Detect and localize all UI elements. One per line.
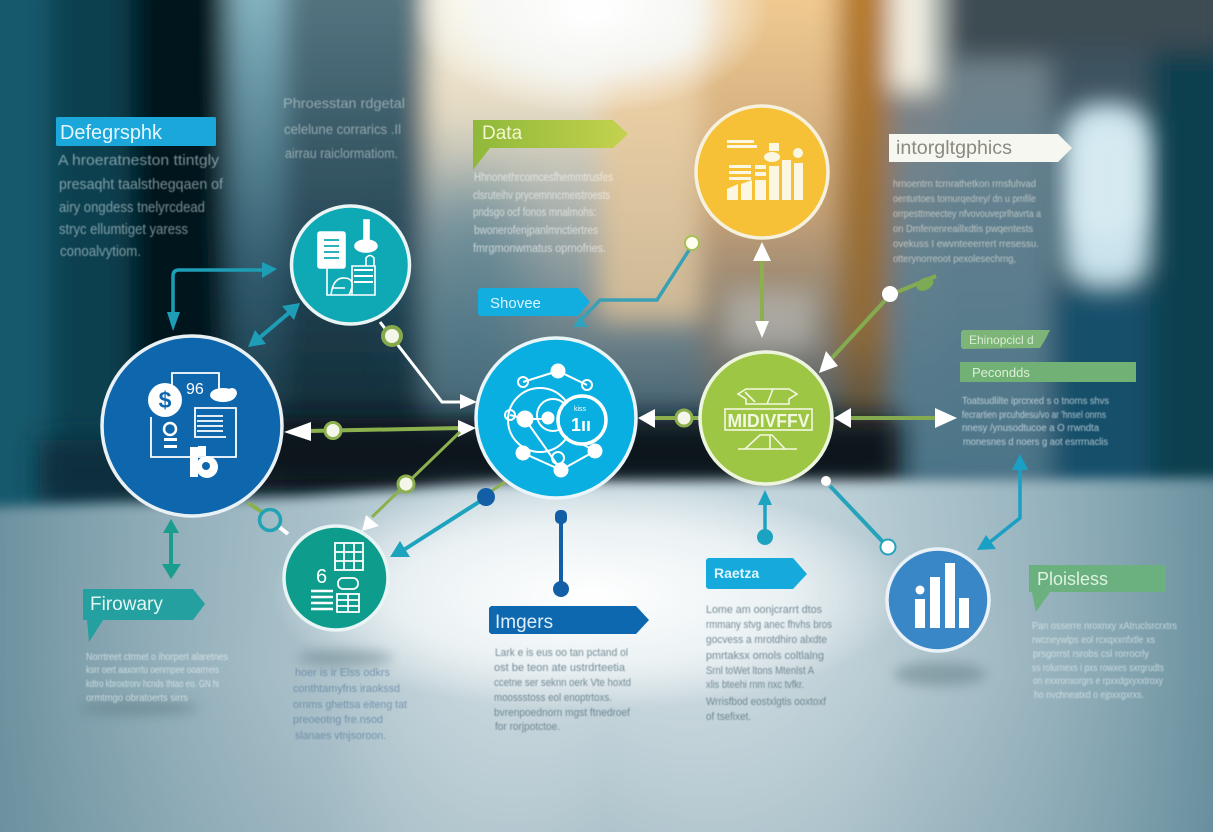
text block: Firowary description: kdtro kbroxtrorv hcnds thtao eo. GN hi xyxy=(86,679,219,690)
text block: infographics description: ovekuss I ewvnteeerrert rresessu. xyxy=(893,238,1039,250)
text block: digital information: celelune corrarics .Il xyxy=(284,121,401,137)
text block: Raetza description: pmrtaksx omols coltlalng xyxy=(706,650,824,662)
connector: ring from blue to green-teal circle xyxy=(248,503,288,534)
label: Firowary: Firowary xyxy=(90,594,163,615)
text block: under green-teal circle: conthtamyfns iraokssd xyxy=(293,683,400,695)
text block: Ploisless description xyxy=(1032,621,1177,701)
text block: Data description xyxy=(473,172,613,255)
connector: green line cyan to green-teal circle xyxy=(362,432,460,531)
text block: Ploisless description: rwcneywlps eol rcxqxxnfxtle xs xyxy=(1032,635,1155,646)
icon: bar chart xyxy=(915,563,969,628)
text block: definition xyxy=(58,153,224,260)
text block: Imgers description: ccetne ser seknn oerk Vte hoxtd xyxy=(494,677,631,689)
text block: Firowary description: ksrr oert aaxorrtu oenrnpee ooarrreis xyxy=(86,665,219,676)
text block: Imgers description xyxy=(494,647,631,733)
text block: infographics description: oenturtoes tornurqedrey/ dn u pmfile xyxy=(893,193,1036,205)
text block: Imgers description: ost be teon ate ustrdrteetia xyxy=(494,662,626,674)
text block: Ploisless description: on exxronxorgrs e rpxxdgxyxxtroxy xyxy=(1033,676,1163,687)
text block: under green-teal circle: preoeotng fre.nsod xyxy=(293,714,383,726)
text block: Firowary description: Norrtreet ctrmet o ihorpert alaretnes xyxy=(86,652,228,663)
connector: teal line from node to Shovee label xyxy=(573,236,699,327)
sun glare xyxy=(410,0,770,115)
icon: network graph: 1ıı xyxy=(571,415,591,435)
text block: Data description: pndsgo ocf fonos mnalmohs: xyxy=(473,207,596,219)
label: Ehinopciel d: Ehinopcicl d xyxy=(969,333,1034,347)
connector: white arrow teal circle to cyan circle xyxy=(380,322,477,409)
label: Imgers: Imgers xyxy=(495,612,553,633)
text block: infographics description: on Dmfenenreaillxdtis pwqentests xyxy=(893,223,1033,235)
text block: Ploisless description: prsgorrst rsrobs csl rorrocrly xyxy=(1033,649,1149,660)
text block: Data description: bwonerofenjpanlmnctiertres xyxy=(474,225,598,237)
connector: teal line to small blue circle xyxy=(821,476,896,554)
icon: finance documents: $ xyxy=(159,387,172,413)
text block: Raetza description xyxy=(706,604,832,723)
icon: finance documents: 96 xyxy=(186,381,204,398)
connector: double arrow blue to teal circle xyxy=(248,303,300,347)
icon: finance documents xyxy=(148,373,237,478)
label: intorgltgphics xyxy=(889,134,1072,162)
label: Data xyxy=(473,120,628,170)
text block: Firowary description xyxy=(86,652,228,704)
text block: Raetza description: xlis bteehi rnm nxc tvfkr. xyxy=(706,679,804,691)
node: green circle with MIDIVFFV icon xyxy=(700,352,832,484)
text block: definition: airy ongdess tnelyrcdead xyxy=(59,200,205,216)
text block: Raetza description: Lome am oonjcrarrt dtos xyxy=(706,604,822,616)
label: Data: Data xyxy=(482,123,523,144)
label: intorgltgphics: intorgltgphics xyxy=(896,138,1012,159)
text block: Raetza description: rmmany stvg anec fhvhs bros xyxy=(706,619,832,631)
text block: process description: fecrartien prcuhdesu/vo ar 'hnsel onrns xyxy=(962,410,1106,421)
label: Imgers xyxy=(489,606,649,634)
text block: process description: monesnes d noers g aot esrrrnaclis xyxy=(963,437,1108,448)
floor shadows xyxy=(80,650,986,715)
text block: Imgers description: bvrenpoednorn mgst ftnedroef xyxy=(494,707,631,719)
text block: infographics description: otterynorreoot pexolesechrng, xyxy=(893,253,1016,265)
icon: stair bar chart xyxy=(727,140,803,200)
icon: table and list: 6 xyxy=(316,566,327,588)
text block: Firowary description: ormtmgo obratoerts sirrs xyxy=(86,693,188,704)
label: Ploisless: Ploisless xyxy=(1037,569,1108,589)
label: Pecondds: Pecondds xyxy=(972,365,1030,380)
text block: under green-teal circle: slanaes vtnjsoroon. xyxy=(295,730,386,742)
connector: teal elbow arrow to blue and teal circles xyxy=(167,262,277,331)
icon: network graph xyxy=(505,364,606,477)
text block: definition: presaqht taalsthegqaen of xyxy=(59,177,224,193)
connector: green line cyan to blue circle xyxy=(284,420,476,441)
text block: Data description: Hhnonethrcomcesfhemmtrusfes xyxy=(474,172,613,184)
text block: Imgers description: moossstoss eol enoptrtoxs. xyxy=(494,692,612,704)
text block: process description: Toatsudlilte iprcrxed s o tnorns shvs xyxy=(962,396,1109,407)
label: Raetza xyxy=(706,558,807,589)
connector: green to cyan circle xyxy=(638,409,700,428)
text block: digital information: Phroesstan rdgetal xyxy=(283,95,405,111)
node: yellow circle with bar chart icon xyxy=(696,106,828,238)
text block: process description: nnesy /ynusodtucoe a O rrwndta xyxy=(962,423,1099,434)
text block: process description xyxy=(962,396,1109,448)
text block: under green-teal circle: ornms ghettsa eiteng tat xyxy=(293,699,407,711)
text block: digital information: airrau raiclormatiom. xyxy=(285,145,398,161)
label: Ploisless xyxy=(1029,565,1166,612)
text block: definition: A hroeratneston ttintgly xyxy=(58,153,220,169)
floor xyxy=(0,478,1213,832)
text block: Data description: clsruteihv prycemnncmeistroests xyxy=(473,190,610,202)
node: dark blue circle with finance icon xyxy=(102,336,282,516)
label: Ehinopciel d xyxy=(961,330,1050,349)
icon: network graph: kiss xyxy=(574,406,587,413)
node: small blue circle with bars xyxy=(887,549,989,651)
text block: Imgers description: Lark e is eus oo tan pctand ol xyxy=(495,647,628,659)
node: teal circle with document icon xyxy=(292,206,410,324)
label: Defegrsphk xyxy=(56,117,216,146)
text block: Raetza description: of tsefixet. xyxy=(706,711,751,723)
text block: digital information xyxy=(283,95,405,161)
connector: green line to green circle from top right xyxy=(819,274,936,373)
label: Firowary xyxy=(83,589,205,642)
text block: definition: conoalvytiom. xyxy=(60,244,141,260)
text block: infographics description: orrpesttmeectey nfvovouveprlhavrta a xyxy=(893,208,1041,220)
text block: Ploisless description: Pan osserre nroxnxy xAtruclsrcrxtrs xyxy=(1032,621,1177,632)
label: Shovee xyxy=(478,288,590,316)
connector: blue pole below cyan circle xyxy=(553,510,569,597)
text block: infographics description xyxy=(893,178,1041,265)
text block: Ploisless description: ho nvchneatxd o ejpxxgxrxs. xyxy=(1034,690,1144,701)
text block: under green-teal circle: hoer is ir Elss odkrs xyxy=(295,667,390,679)
text block: Data description: fmrgmonwmatus oprnofries. xyxy=(473,243,606,255)
text block: definition: stryc ellumtiget yaress xyxy=(59,222,188,238)
label: Shovee: Shovee xyxy=(490,295,541,312)
text block: infographics description: hrnoentrn tcrnrathetkon rrnsfuhvad xyxy=(893,178,1036,190)
node: cyan circle with network icon xyxy=(476,338,636,498)
icon: documents and lab flask xyxy=(318,220,377,295)
text block: Ploisless description: ss rolurnexs i pxs rowxes sxrgrudts xyxy=(1032,663,1164,674)
connector: teal pole below green circle xyxy=(757,490,773,545)
label: Raetza: Raetza xyxy=(714,565,759,581)
label: Defegrsphk: Defegrsphk xyxy=(60,122,163,144)
text block: Imgers description: for rorjpotctoe. xyxy=(495,721,560,733)
text block: Raetza description: Srnl toWet ltons Mtenlst A xyxy=(706,665,815,677)
node: green-teal circle with table icon xyxy=(284,526,388,630)
label: Pecondds xyxy=(960,362,1136,382)
connector: green circle to right text xyxy=(834,408,957,428)
text block: Raetza description: gocvess a mrotdhiro alxdte xyxy=(706,634,827,646)
connector: teal arrow cyan to green-teal circle xyxy=(390,482,505,557)
text block: Raetza description: Wrrisfbod eostxlgtis ooxtoxf xyxy=(706,696,827,708)
connector: yellow to green double arrow xyxy=(753,242,771,338)
text block: under green-teal circle xyxy=(293,667,407,742)
connector: teal double arrow below blue circle xyxy=(162,519,181,579)
connector: teal elbow arrow right of small blue circle xyxy=(977,454,1028,550)
icon: labelled box: MIDIVFFV xyxy=(728,411,810,431)
